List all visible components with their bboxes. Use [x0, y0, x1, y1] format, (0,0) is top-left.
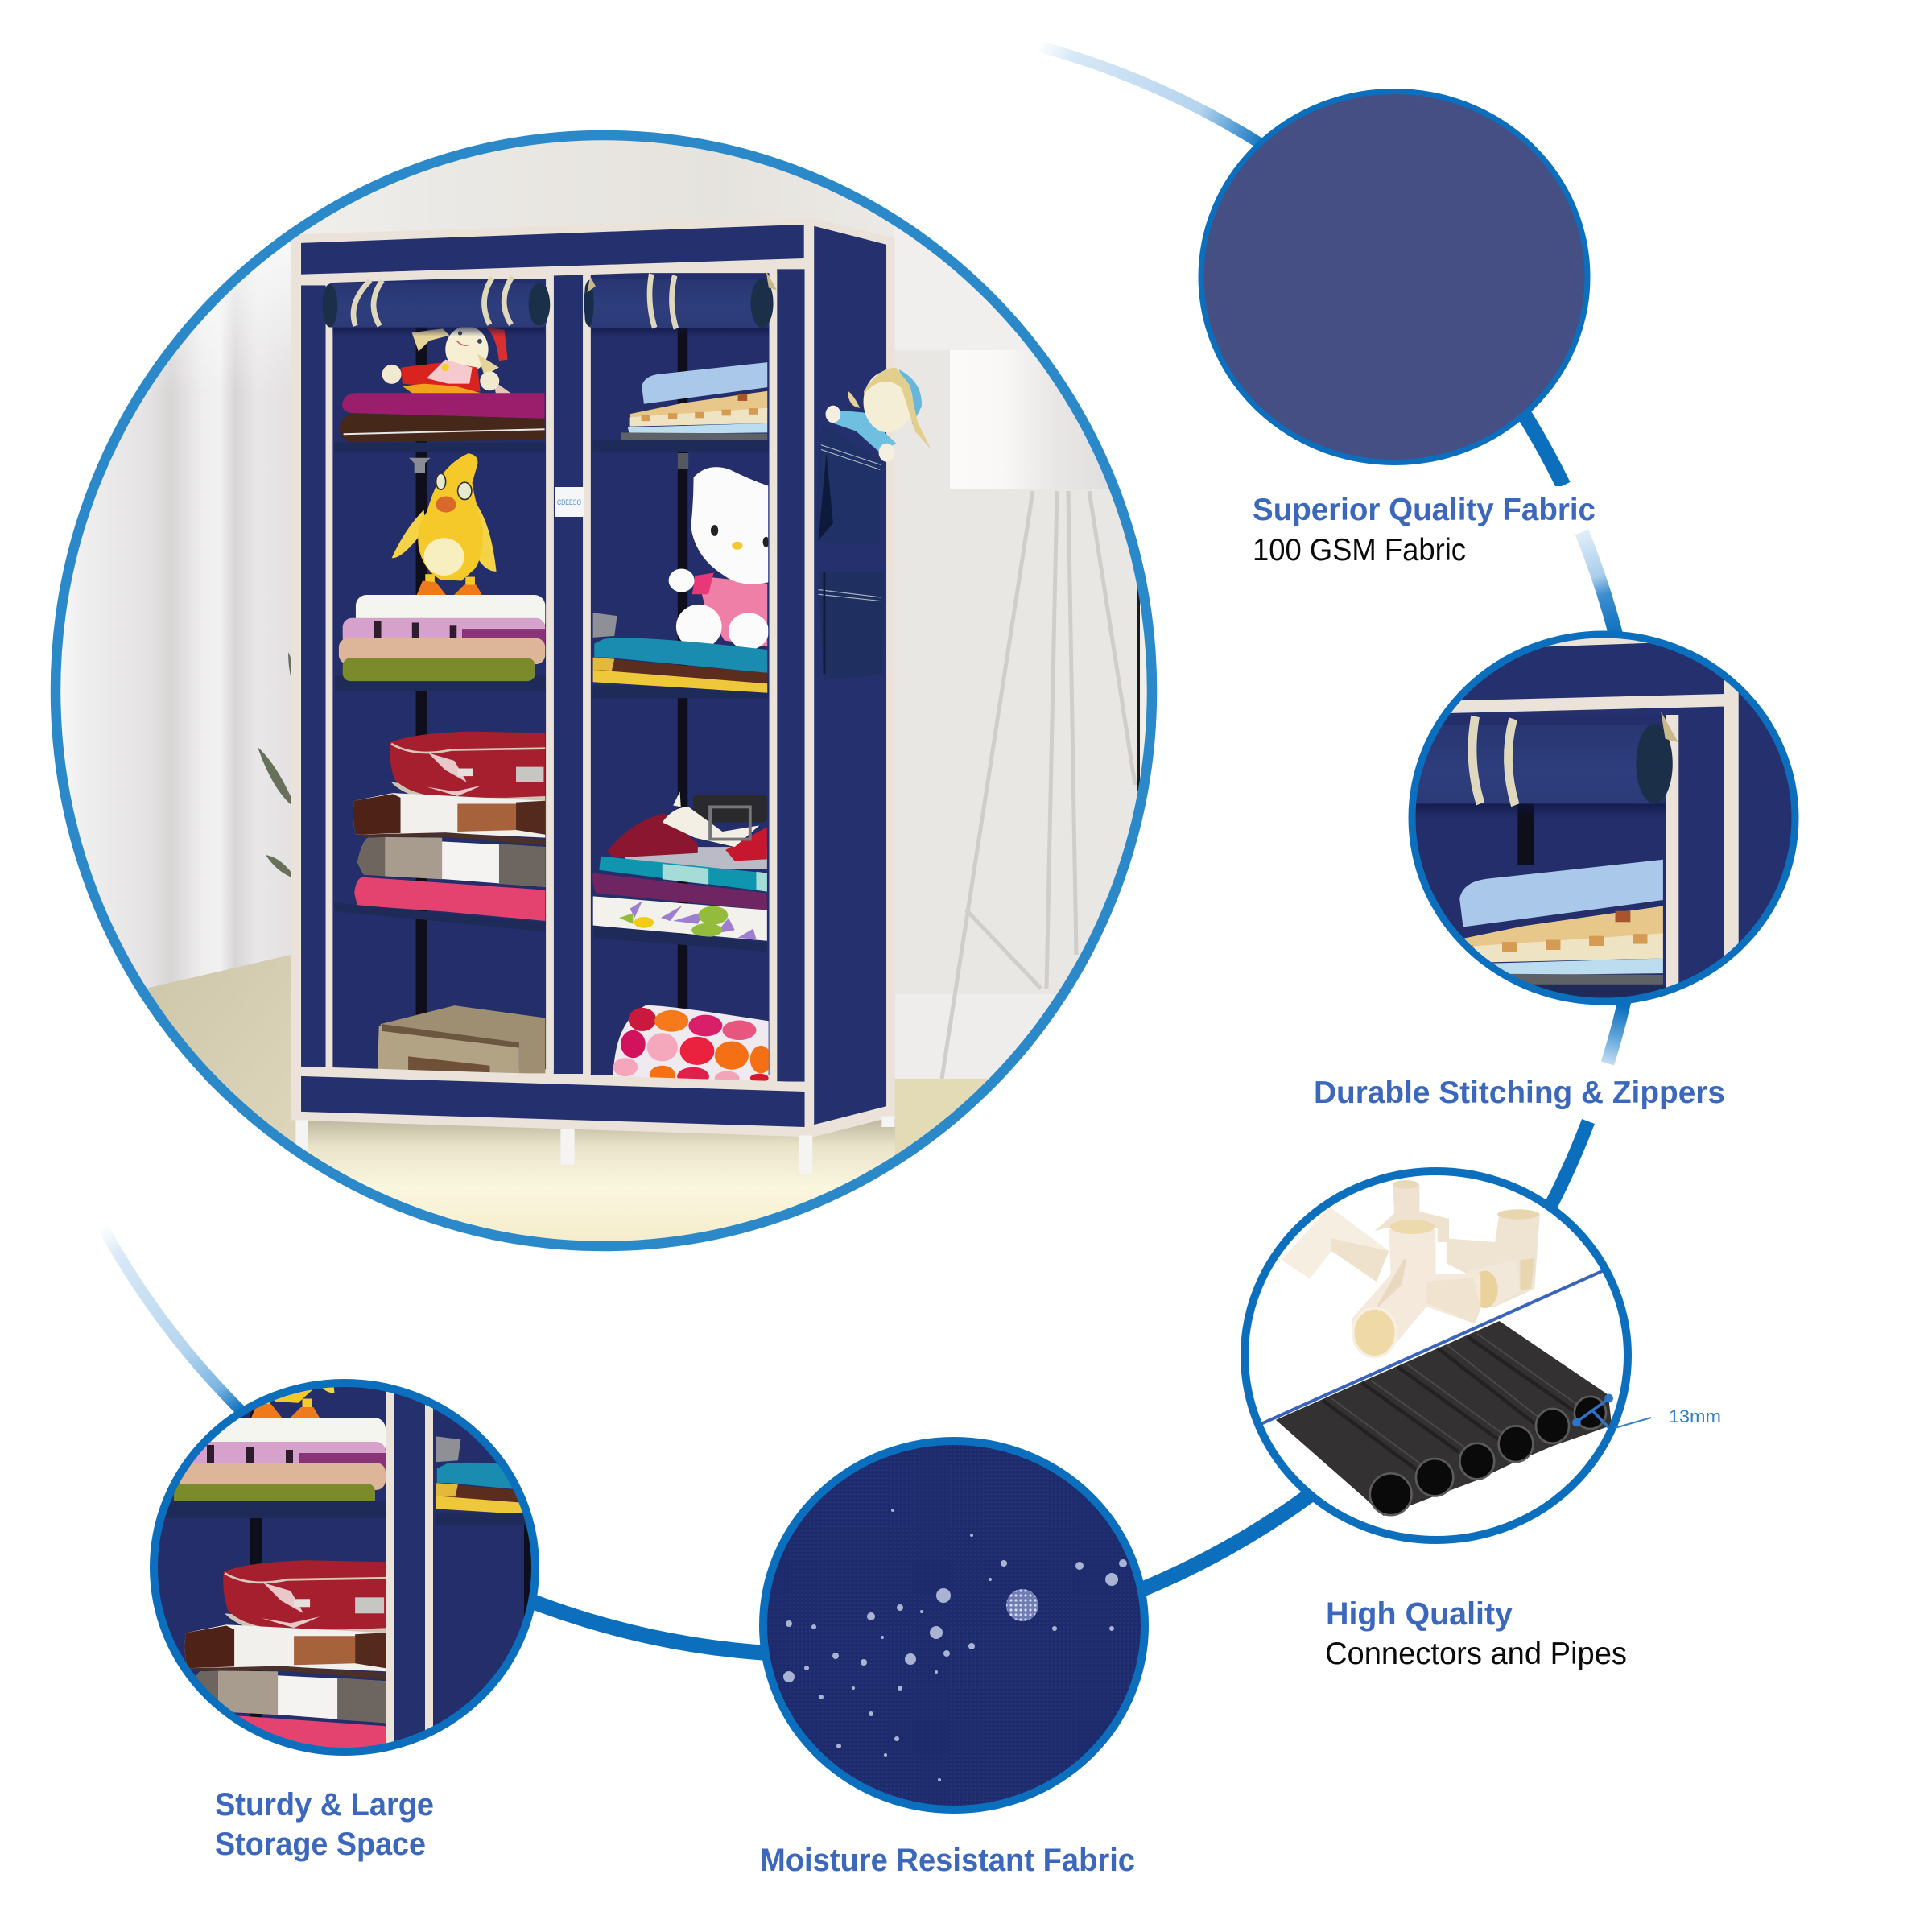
pipe diameter marker	[1574, 1395, 1612, 1428]
label: high quality connectors	[1325, 1596, 1627, 1671]
label: superior quality fabric	[1253, 486, 1610, 568]
sturdy close-up structure	[147, 1269, 619, 1769]
folded shirts	[621, 362, 767, 440]
panel: stitching and zippers circle	[1409, 631, 1798, 1005]
panel: moisture resistant fabric circle	[763, 1441, 1145, 1810]
panel: superior fabric circle	[1201, 92, 1587, 462]
pole joints	[409, 453, 688, 473]
callout: 13mm pipe size: 13mm	[1669, 1406, 1721, 1426]
connector arc linking feature circles	[102, 43, 1630, 1654]
label: superior quality fabric: Superior Quality Fabric	[1253, 493, 1596, 527]
towels right shelf two	[593, 613, 767, 693]
label: high quality connectors: High Quality	[1326, 1596, 1513, 1632]
support poles	[416, 327, 687, 1016]
label: high quality connectors: Connectors and Pipes	[1325, 1637, 1627, 1671]
front side strips and centre flap	[301, 269, 805, 1082]
label: sturdy and large storage	[215, 1787, 434, 1862]
towels shelf two	[339, 595, 545, 681]
storage box	[378, 1005, 545, 1073]
side pockets	[817, 423, 884, 680]
room background	[48, 129, 1161, 1256]
frame trim	[291, 217, 895, 1137]
black pipes	[1276, 1321, 1612, 1516]
panel: connectors and pipes circle	[1245, 1171, 1628, 1540]
stitching close-up structure	[1415, 638, 1792, 998]
label: superior quality fabric: 100 GSM Fabric	[1253, 533, 1466, 568]
yellow duck toy	[392, 453, 497, 602]
shelves one and two	[334, 440, 769, 698]
towels shelf one	[340, 393, 545, 442]
left roller with straps	[323, 276, 550, 336]
wardrobe	[291, 217, 931, 1174]
label: moisture resistant fabric: Moisture Resistant Fabric	[760, 1843, 1135, 1878]
label: durable stitching: Durable Stitching & Zippers	[1314, 1075, 1725, 1110]
side panel	[814, 226, 886, 1125]
bottom panel	[301, 1076, 805, 1127]
label: sturdy and large storage: Storage Space	[215, 1827, 426, 1862]
cream plastic connectors	[1282, 1180, 1540, 1357]
water droplets	[783, 1509, 1127, 1781]
main circle ring	[56, 135, 1152, 1246]
top panel	[301, 225, 804, 275]
label: sturdy and large storage: Sturdy & Large	[215, 1787, 434, 1823]
panel: sturdy storage circle	[147, 1269, 619, 1769]
red quilt bag and striped blankets	[334, 732, 545, 931]
side pocket doll	[826, 368, 931, 462]
brand tag: CDEESO	[557, 498, 581, 506]
left compartment back	[332, 279, 546, 1069]
right roller with straps	[584, 270, 777, 337]
trim lines	[291, 219, 814, 1132]
right compartment back	[591, 273, 770, 1075]
doll on top left shelf	[382, 326, 513, 397]
polka dot cushion	[613, 1005, 772, 1086]
blue diagonal divider	[1261, 1271, 1603, 1424]
white kitty toy	[669, 467, 770, 650]
legs	[295, 1117, 895, 1174]
callout: 13mm pipe size	[1615, 1406, 1721, 1428]
brand tag	[555, 487, 584, 517]
panel: main wardrobe circle	[48, 129, 1161, 1256]
clothes pile with belt	[592, 791, 767, 952]
